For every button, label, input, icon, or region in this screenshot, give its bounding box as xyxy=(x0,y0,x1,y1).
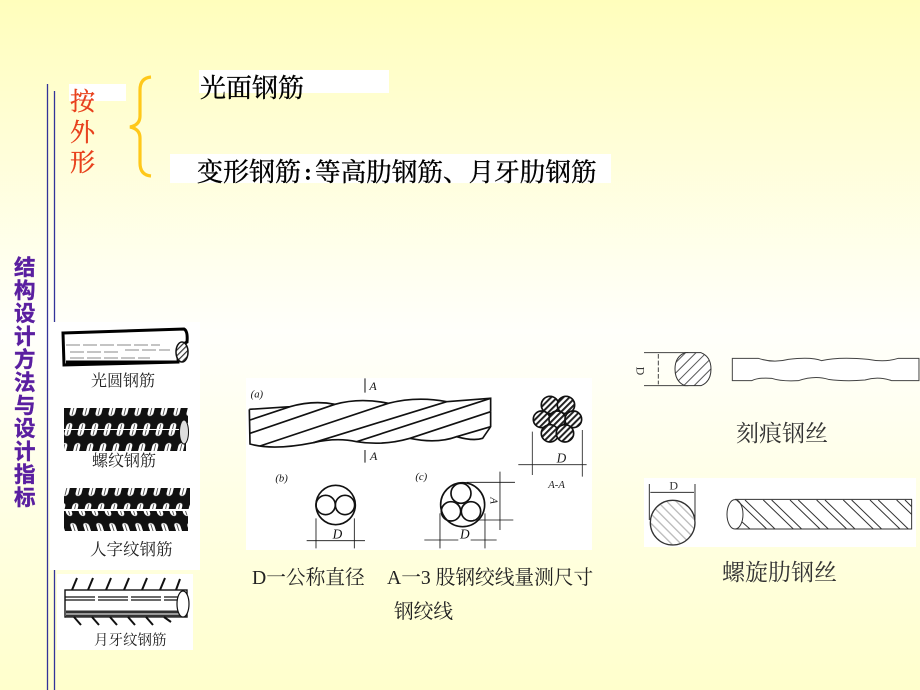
sidebar title: 法 xyxy=(14,371,36,395)
three wire section: A xyxy=(488,496,499,504)
two wire section xyxy=(307,485,365,548)
option two: deformed bar: : xyxy=(304,160,312,186)
spiral wire section: D xyxy=(669,478,678,492)
section marks: A xyxy=(369,449,378,463)
category label: 按外形: 按 xyxy=(70,88,96,116)
label: indented wire: 刻痕钢丝 xyxy=(736,421,828,446)
section marks xyxy=(251,378,428,485)
sidebar title: 与 xyxy=(14,394,36,418)
sidebar title: 方 xyxy=(14,347,36,372)
three wire section: D xyxy=(459,526,470,541)
rebar: plain round xyxy=(63,329,188,365)
option two: deformed bar xyxy=(170,154,611,187)
indented wire side view xyxy=(732,358,919,381)
sidebar title: 计 xyxy=(14,325,36,349)
option two: deformed bar: 变形钢筋 xyxy=(197,158,301,187)
highlight behind category label xyxy=(69,84,126,101)
option two: deformed bar: 等高肋钢筋、月牙肋钢筋 xyxy=(315,158,597,187)
strand caption: D一公称直径 xyxy=(252,567,365,589)
section marks: A xyxy=(368,379,377,393)
strand title: 钢绞线 xyxy=(394,601,453,623)
section marks: (c) xyxy=(415,472,428,483)
section dimension xyxy=(518,430,587,491)
sidebar title: 结 xyxy=(14,256,36,280)
indented wire diagram xyxy=(633,353,919,386)
spiral wire side view xyxy=(727,499,912,529)
brace xyxy=(130,77,151,176)
two wire section: D xyxy=(332,526,343,541)
sidebar title: 构 xyxy=(14,279,36,303)
label: threaded: 螺纹钢筋 xyxy=(92,452,156,470)
category label: 按外形: 外 xyxy=(70,119,96,147)
label: plain round: 光圆钢筋 xyxy=(91,372,155,390)
vertical rule: inner upper xyxy=(54,91,56,322)
spiral wire section xyxy=(649,478,695,545)
rebar types panel xyxy=(50,322,200,570)
option one: plain bar xyxy=(199,70,389,103)
spiral rib wire panel xyxy=(644,478,916,547)
section marks: (b) xyxy=(275,474,288,485)
twisted strand drawing xyxy=(249,398,491,447)
section dimension: D xyxy=(556,450,567,465)
sidebar title: 设 xyxy=(14,417,36,441)
rebar: herringbone xyxy=(64,488,190,531)
indented wire section: D xyxy=(633,367,647,376)
strand caption xyxy=(252,567,593,589)
sidebar title: 标 xyxy=(14,486,36,510)
indented wire section xyxy=(633,353,711,386)
rebar: threaded xyxy=(64,408,188,451)
label: spiral rib wire: 螺旋肋钢丝 xyxy=(722,560,837,585)
seven wire section xyxy=(533,396,582,442)
sidebar title: 计 xyxy=(14,440,36,464)
label: crescent rib: 月牙纹钢筋 xyxy=(94,632,166,649)
sidebar title: 设 xyxy=(14,302,36,326)
rebar: crescent rib xyxy=(65,578,189,625)
strand caption: A一3 股钢绞线量测尺寸 xyxy=(387,567,593,589)
three wire section xyxy=(424,472,515,548)
category label: 按外形: 形 xyxy=(70,150,95,177)
strand diagram panel xyxy=(246,378,592,550)
vertical rule: inner lower xyxy=(54,570,56,690)
section marks: (a) xyxy=(251,389,264,400)
section dimension: A-A xyxy=(547,480,565,491)
label: herringbone: 人字纹钢筋 xyxy=(90,540,172,559)
sidebar title: 指 xyxy=(14,463,36,487)
crescent rib rebar panel xyxy=(57,574,193,650)
vertical rule: outer xyxy=(46,84,48,690)
option one: plain bar: 光面钢筋 xyxy=(200,74,304,103)
